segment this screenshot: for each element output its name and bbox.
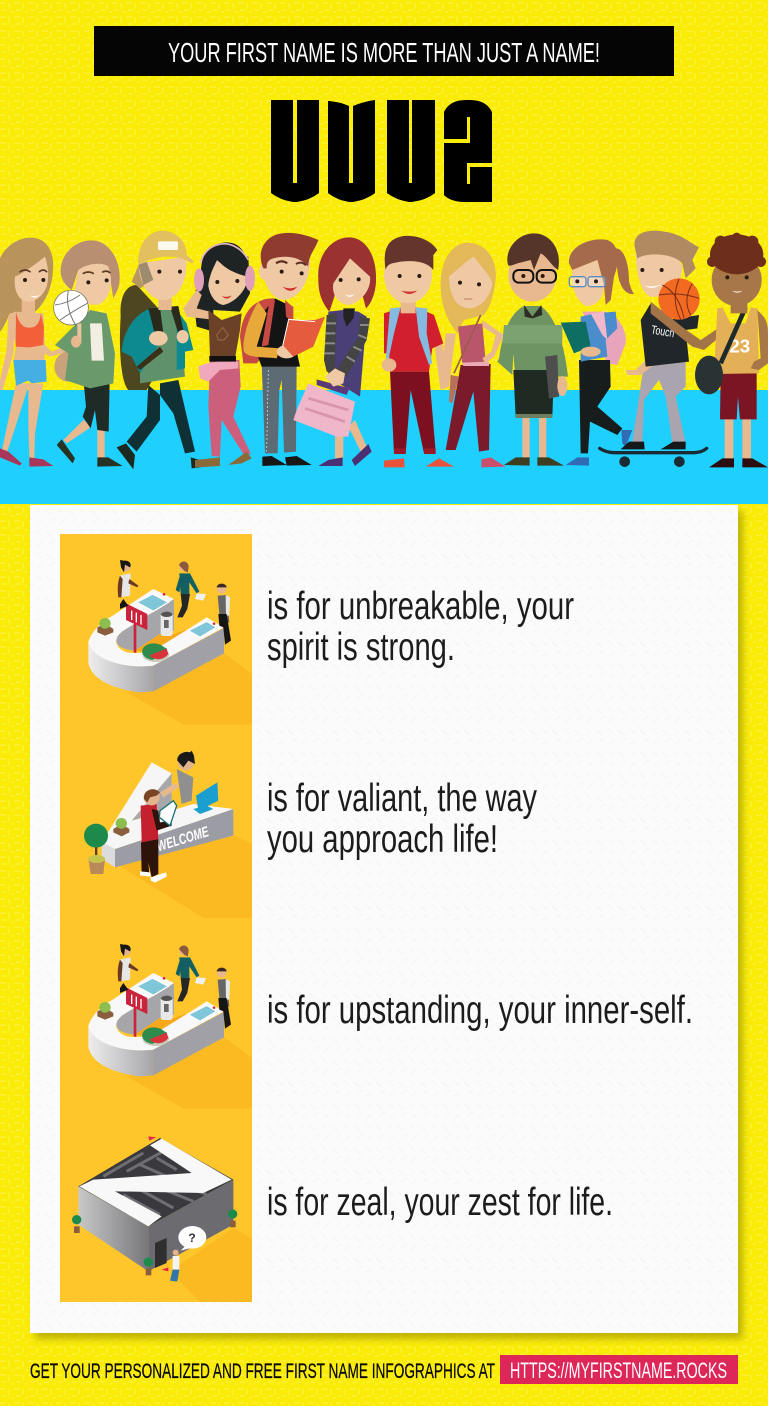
character: girl with headphones	[183, 242, 255, 467]
text: U: is for unbreakable, your	[267, 585, 574, 628]
text: U: spirit is strong.	[267, 626, 455, 669]
illustration: group of young people, right half	[382, 231, 768, 467]
orange illustration column	[60, 534, 252, 1302]
text: Z: is for zeal, your zest for life.	[267, 1181, 613, 1224]
text: U	[267, 585, 574, 669]
character: girl with volleyball	[54, 240, 123, 467]
cyan floor band	[0, 390, 768, 504]
text: V: is for valiant, the way	[267, 777, 537, 820]
header banner	[94, 26, 674, 76]
character: boy on skateboard with basketball	[600, 231, 724, 467]
character: girl with pink handbag	[293, 237, 376, 466]
character: boy in basketball tank with bag	[695, 233, 768, 467]
title: name UVUZ: UVUZ	[271, 72, 492, 226]
icon: Z-shaped maze building: ?	[188, 1231, 196, 1245]
character: boy in basketball tank with bag: 23	[729, 336, 750, 357]
icon: V-shaped welcome desk: WELCOME	[155, 824, 212, 855]
footer call to action: GET YOUR PERSONALIZED AND FREE FIRST NAME INFOGRAPHICS AT	[30, 1360, 495, 1383]
character: boy with glasses	[497, 233, 568, 466]
icon: Z-shaped maze building	[72, 1136, 252, 1302]
character: boy on skateboard with basketball: Touch	[650, 322, 676, 340]
main white panel	[30, 505, 743, 1339]
icon: U-shaped food counter	[88, 944, 252, 1109]
character: blonde girl	[441, 243, 506, 467]
character: girl with ponytail and tablet	[561, 239, 634, 466]
character: boy in red shirt	[382, 236, 454, 467]
text: V: you approach life!	[267, 818, 498, 861]
character: boy reading a book	[240, 233, 325, 466]
character: boy with cap and backpack	[117, 231, 205, 469]
icon: U-shaped food counter	[88, 560, 252, 725]
illustration: group of young people, left half	[0, 231, 376, 469]
character: girl in orange top	[0, 238, 80, 467]
icon: V-shaped welcome desk	[84, 751, 252, 918]
text: V	[267, 777, 537, 861]
